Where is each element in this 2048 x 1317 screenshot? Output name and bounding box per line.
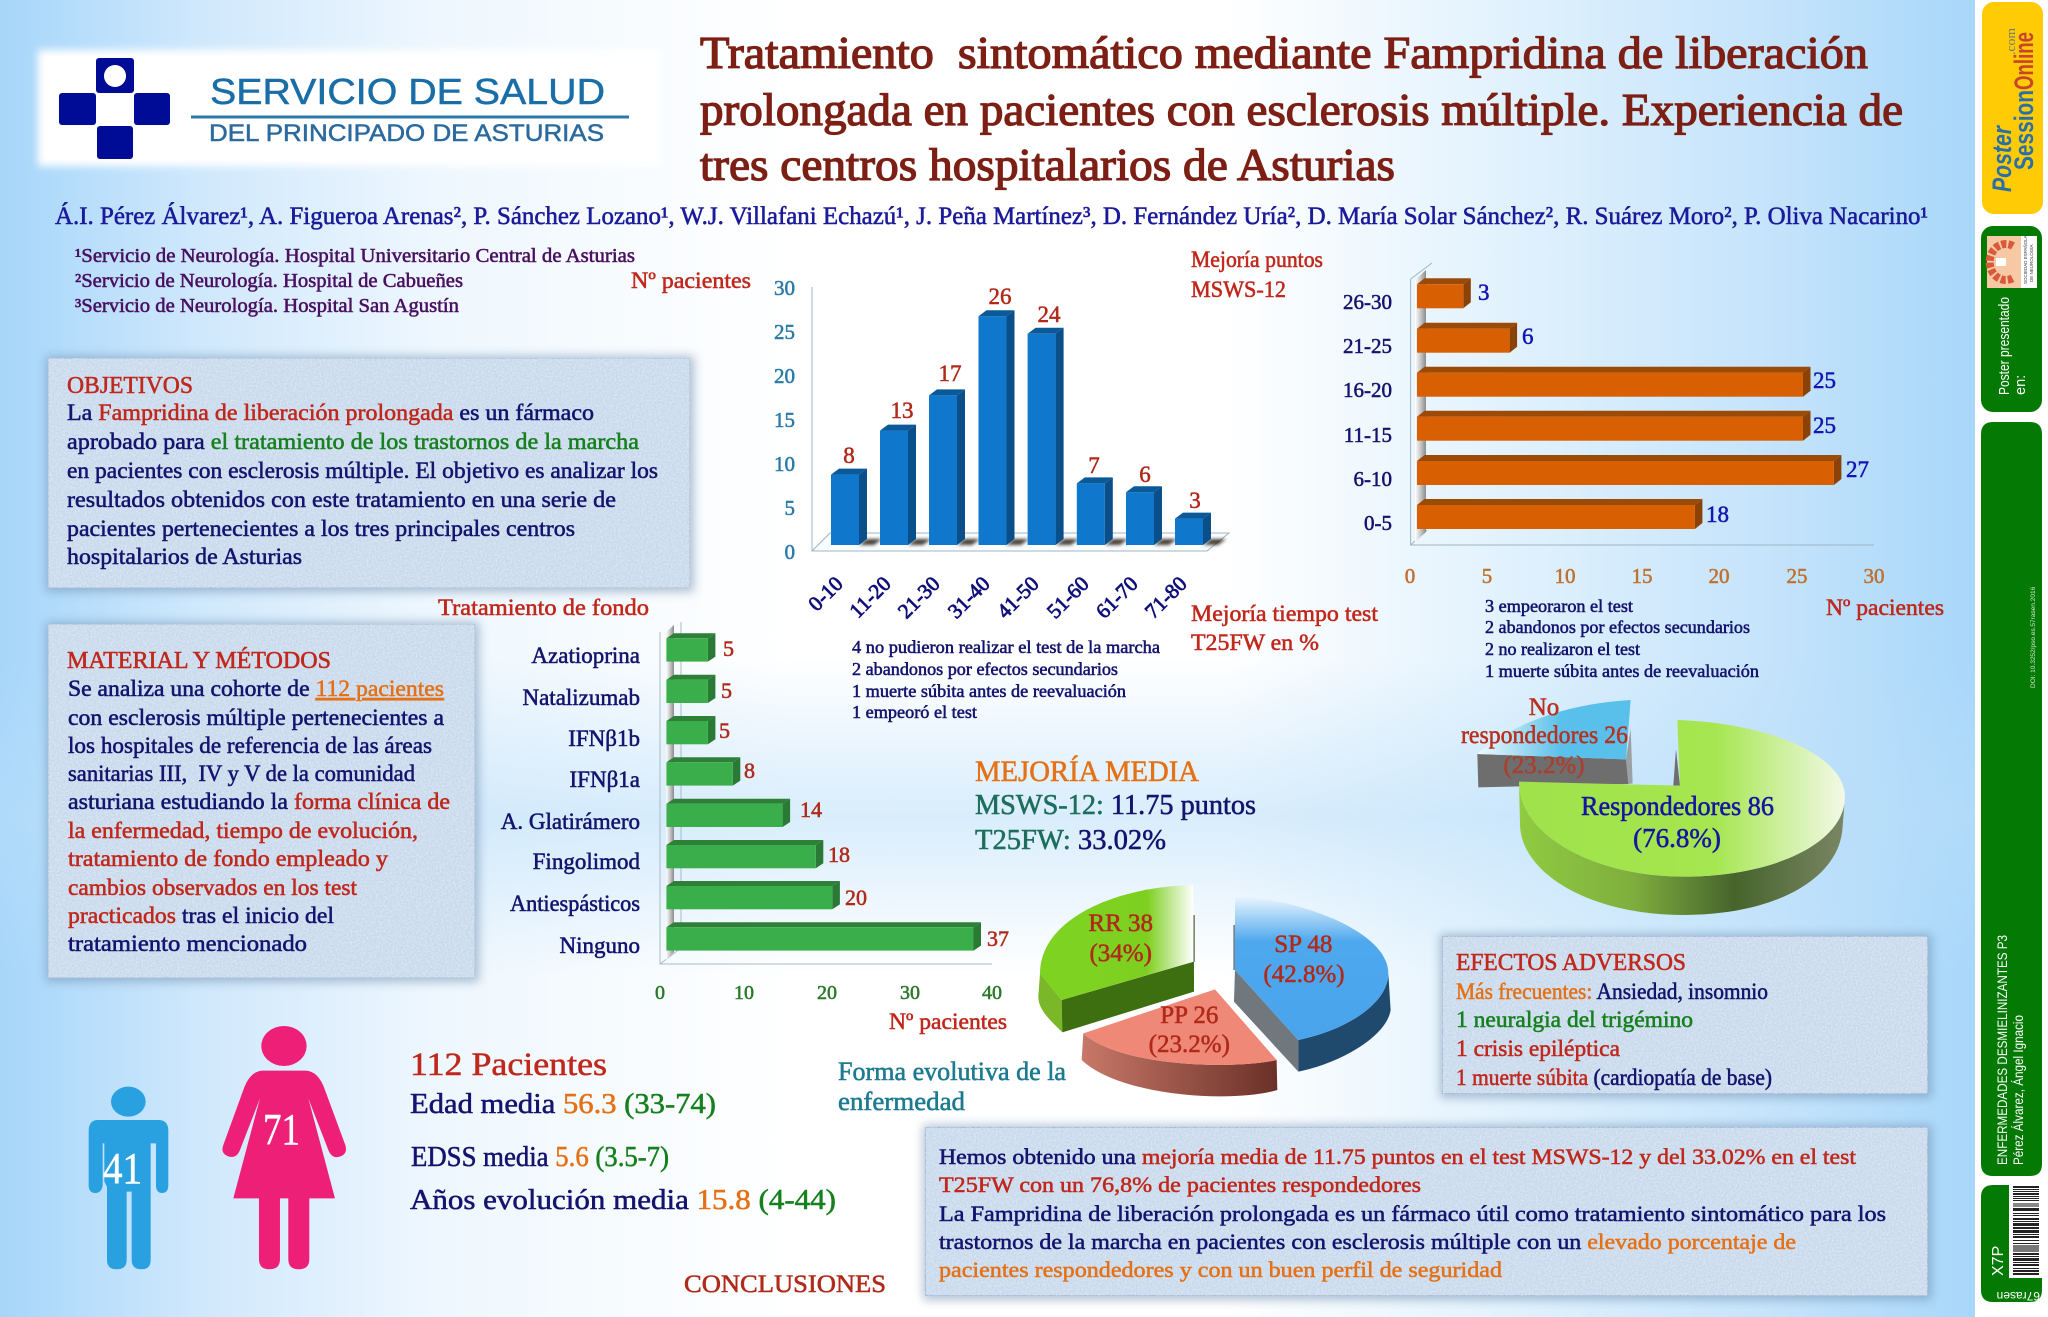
notes: test MSWS: 2 no realizaron el test <box>1485 639 1640 659</box>
value labels: 37 <box>987 926 1009 951</box>
value labels <box>719 636 1009 951</box>
labels: PP 26 <box>1160 1002 1218 1029</box>
panel: poster session online <box>1982 2 2043 214</box>
x axis labels: 41-50 <box>992 572 1044 623</box>
y axis labels: 20 <box>774 364 795 388</box>
value labels: 5 <box>723 636 734 661</box>
category labels <box>501 643 640 958</box>
stats: pacientes: 112 Pacientes <box>410 1047 607 1083</box>
slice: SP <box>1233 895 1391 1072</box>
x axis labels: 20 <box>1708 564 1730 588</box>
y axis labels <box>774 276 795 564</box>
bar 11-20 <box>880 425 916 545</box>
panel: poster session online: Session <box>2009 90 2039 170</box>
y axis labels: 0 <box>784 540 795 564</box>
text block: material y metodos <box>68 676 450 956</box>
axis title: pacientes chart 1: Nº pacientes <box>631 268 751 293</box>
stats: pacientes: Edad media 56.3 (33-74) <box>410 1088 716 1120</box>
panel: categoria: Pérez Álvarez, Ángel Ignacio <box>2010 1015 2026 1165</box>
x axis labels: 0 <box>1405 564 1415 588</box>
bar chart: tratamiento de fondo <box>501 622 1009 1004</box>
y axis labels: 15 <box>774 408 795 432</box>
panel: categoria: ENFERMEDADES DESMIELINIZANTES P3 <box>1994 935 2010 1165</box>
bar Antiespasticos <box>666 881 840 909</box>
text block: conclusiones: trastornos de la marcha en pacientes con esclerosis múltiple con un elevado porcentaje de <box>939 1229 1796 1254</box>
text block: material y metodos: tratamiento de fondo empleado y <box>68 846 389 871</box>
text block: objetivos: La Fampridina de liberación prolongada es un fármaco <box>67 400 594 426</box>
category labels: IFNβ1b <box>568 726 640 751</box>
text block: efectos adversos <box>1456 979 1772 1090</box>
axis title: pacientes chart 2: Nº pacientes <box>1826 595 1944 620</box>
y axis labels: 10 <box>774 452 795 476</box>
text block: objetivos <box>67 400 658 570</box>
x axis labels: 20 <box>817 982 837 1004</box>
x axis labels: 31-40 <box>943 572 995 623</box>
bar A. Glatiramero <box>666 799 790 827</box>
stats: pacientes: EDSS media 5.6 (3.5-7) <box>411 1141 669 1173</box>
panel: material y metodos <box>46 622 479 982</box>
value labels: 6 <box>1139 462 1151 487</box>
panel: poster session online: Poster <box>1987 125 2017 192</box>
x axis labels: 30 <box>900 982 920 1004</box>
value labels <box>1478 280 1869 527</box>
panel: categoria <box>1981 422 2042 1176</box>
callout: mejoria media: MSWS-12: 11.75 puntos <box>975 790 1256 821</box>
value labels: 6 <box>1522 324 1534 349</box>
value labels: 18 <box>1706 502 1729 527</box>
category labels: Azatioprina <box>531 643 640 668</box>
x axis labels: 30 <box>1864 564 1884 588</box>
x axis labels <box>655 982 1002 1004</box>
bar 0-5 <box>1417 499 1702 529</box>
text block: conclusiones: T25FW con un 76,8% de pacientes respondedores <box>939 1172 1421 1197</box>
value labels: 3 <box>1478 280 1490 305</box>
bar IFN beta 1a <box>666 757 740 786</box>
bar 71-80 <box>1175 513 1211 545</box>
panel: poster presentado <box>1981 226 2042 412</box>
labels: RR 38 <box>1088 910 1153 937</box>
panel: poster session online: .com <box>2003 28 2018 55</box>
value labels: 26 <box>988 284 1012 309</box>
bar 21-25 <box>1417 323 1517 353</box>
x axis labels <box>1405 564 1884 588</box>
x axis labels: 71-80 <box>1140 572 1192 623</box>
axis title: mejoria tiempo T25FW <box>1191 601 1379 655</box>
x axis labels: 10 <box>734 982 754 1004</box>
x axis labels <box>803 572 1192 623</box>
category labels: Natalizumab <box>522 685 640 710</box>
category labels: A. Glatirámero <box>501 809 640 834</box>
text block: efectos adversos: 1 muerte súbita (cardiopatía de base) <box>1456 1065 1772 1090</box>
panel: poster presentado: Poster presentado <box>1997 297 2013 395</box>
affiliations: ³Servicio de Neurología. Hospital San Agustín <box>75 296 459 317</box>
bar 11-15 <box>1417 411 1810 441</box>
y axis labels: 30 <box>774 276 795 300</box>
bar 51-60 <box>1077 477 1113 545</box>
category labels: 0-5 <box>1364 511 1392 535</box>
y axis labels: 25 <box>774 320 795 344</box>
axis title: mejoria puntos MSWS-12 <box>1191 247 1323 302</box>
icon: woman 71 <box>222 1026 346 1269</box>
category labels: Ninguno <box>560 933 640 958</box>
text block: objetivos: resultados obtenidos con este tratamiento en una serie de <box>67 487 616 513</box>
text block: efectos adversos: 1 crisis epiléptica <box>1456 1036 1620 1061</box>
value labels: 14 <box>800 797 822 822</box>
label: no respondedores: respondedores 26 <box>1461 722 1628 749</box>
axis title: tratamiento de fondo: Tratamiento de fondo <box>438 595 649 620</box>
icon: sociedad de neurologia: DE NEUROLOGÍA <box>2028 244 2034 282</box>
value labels: 20 <box>845 885 867 910</box>
text block: conclusiones <box>939 1144 1886 1282</box>
icon: man 41 <box>89 1087 168 1269</box>
x axis labels: 11-20 <box>844 572 896 623</box>
bar Azatioprina <box>666 633 715 662</box>
bar chart: mejoria MSWS-12 <box>1343 263 1884 588</box>
heading: efectos adversos: EFECTOS ADVERSOS <box>1456 950 1686 976</box>
labels <box>1088 910 1345 1058</box>
labels: (42.8%) <box>1263 961 1345 988</box>
bar chart: edad <box>774 276 1229 623</box>
text block: objetivos: pacientes pertenecientes a los tres principales centros <box>67 516 575 542</box>
text block: conclusiones: pacientes respondedores y con un buen perfil de seguridad <box>939 1257 1502 1282</box>
slice: respondedores <box>1519 720 1845 915</box>
text block: objetivos: aprobado para el tratamiento de los trastornos de la marcha <box>67 429 640 455</box>
category labels: 26-30 <box>1343 290 1392 314</box>
notes: test marcha: 2 abandonos por efectos secundarios <box>852 659 1118 679</box>
value labels: 18 <box>828 842 850 867</box>
label: no respondedores: (23.2%) <box>1503 752 1585 779</box>
axis title: mejoria tiempo T25FW: Mejoría tiempo test <box>1191 601 1379 626</box>
labels: SP 48 <box>1274 931 1332 958</box>
panel: poster session online: Online <box>2009 32 2039 90</box>
value labels: 8 <box>843 443 855 468</box>
bar IFN beta 1b <box>666 716 715 744</box>
x axis labels: 40 <box>982 982 1002 1004</box>
slice: RR <box>1038 885 1195 1032</box>
bar 61-70 <box>1126 486 1162 545</box>
icon: sociedad de neurologia <box>1987 235 2037 288</box>
panel: poster presentado: en: <box>2013 375 2029 395</box>
logo: Servicio de Salud: SERVICIO DE SALUD <box>210 71 605 112</box>
text block: material y metodos: los hospitales de referencia de las áreas <box>68 733 432 758</box>
title <box>700 28 1903 190</box>
value labels: 7 <box>1088 453 1100 478</box>
text block: conclusiones: La Fampridina de liberación prolongada es un fármaco útil como tratamiento sintomático para los <box>939 1201 1886 1226</box>
notes: test marcha <box>852 637 1160 722</box>
text block: material y metodos: la enfermedad, tiempo de evolución, <box>68 818 418 843</box>
notes: test MSWS: 3 empeoraron el test <box>1485 596 1633 616</box>
category labels: 11-15 <box>1344 423 1392 447</box>
category labels: 21-25 <box>1343 334 1392 358</box>
label: forma evolutiva: enfermedad <box>838 1087 965 1116</box>
notes: test MSWS: 2 abandonos por efectos secundarios <box>1485 617 1750 637</box>
text block: material y metodos: asturiana estudiando la forma clínica de <box>68 789 450 814</box>
label: respondedores: Respondedores 86 <box>1581 791 1774 821</box>
heading: conclusiones: CONCLUSIONES <box>684 1271 886 1298</box>
panel: objetivos <box>46 356 694 592</box>
icon: sociedad de neurologia: SOCIEDAD ESPAÑOLA <box>2022 235 2028 284</box>
label: respondedores: (76.8%) <box>1633 823 1721 853</box>
bar 21-30 <box>929 389 965 545</box>
panel: categoria: DOI: 10.3252/pso.es.57rasen.2016 <box>2030 586 2037 688</box>
label: no respondedores: No <box>1529 694 1559 721</box>
notes: test MSWS: 1 muerte súbita antes de reevaluación <box>1485 661 1759 681</box>
axis title: mejoria puntos MSWS-12: Mejoría puntos <box>1191 247 1323 272</box>
x axis labels: 25 <box>1786 564 1808 588</box>
notes: test marcha: 1 muerte súbita antes de reevaluación <box>852 681 1126 701</box>
icon: man 41: 41 <box>103 1144 142 1193</box>
affiliations: ²Servicio de Neurología. Hospital de Cabueñes <box>75 271 463 292</box>
text block: material y metodos: sanitarias III, IV y V de la comunidad <box>68 761 415 786</box>
bar 16-20 <box>1417 367 1810 397</box>
labels: (23.2%) <box>1149 1031 1230 1058</box>
panel: barcode: 67rasen <box>1997 1289 2040 1303</box>
bar 41-50 <box>1028 328 1064 545</box>
heading: material y metodos: MATERIAL Y MÉTODOS <box>67 648 331 674</box>
text block: objetivos: hospitalarios de Asturias <box>67 544 302 570</box>
bar Natalizumab <box>666 675 715 703</box>
authors: Á.I. Pérez Álvarez¹, A. Figueroa Arenas², P. Sánchez Lozano¹, W.J. Villafani Echazú¹, J. Peña Martínez³, D. Fernández Uría², D. María Solar Sánchez², R. Suárez Moro², P. Oliva Nacarino¹ <box>55 202 1928 230</box>
text block: material y metodos: tratamiento mencionado <box>68 931 307 956</box>
title: tres centros hospitalarios de Asturias <box>700 140 1395 190</box>
value labels: 24 <box>1038 302 1061 327</box>
x axis labels: 61-70 <box>1091 572 1143 623</box>
value labels: 25 <box>1813 413 1836 438</box>
callout: mejoria media: MEJORÍA MEDIA <box>975 755 1199 788</box>
category labels: Fingolimod <box>533 849 640 874</box>
bar Fingolimod <box>666 840 823 868</box>
pie chart: respondedores <box>1461 694 1845 915</box>
bar 0-10 <box>831 469 867 545</box>
notes: test marcha: 1 empeoró el test <box>852 702 977 722</box>
text block: material y metodos: practicados tras el inicio del <box>68 903 334 928</box>
text block: efectos adversos: Más frecuentes: Ansiedad, insomnio <box>1456 979 1768 1004</box>
value labels: 8 <box>744 758 755 783</box>
text block: objetivos: en pacientes con esclerosis múltiple. El objetivo es analizar los <box>67 458 658 484</box>
floor shadows <box>859 539 1226 545</box>
axis title: mejoria puntos MSWS-12: MSWS-12 <box>1191 277 1286 302</box>
panel: barcode: X7P <box>1990 1246 2007 1276</box>
label: forma evolutiva <box>838 1057 1066 1116</box>
panel: barcode <box>1981 1185 2042 1303</box>
text block: material y metodos: Se analiza una cohorte de 112 pacientes <box>68 676 444 701</box>
label: forma evolutiva: Forma evolutiva de la <box>838 1057 1066 1086</box>
title: Tratamiento sintomático mediante Fampridina de liberación <box>700 28 1868 78</box>
value labels: 5 <box>719 718 730 743</box>
panel: conclusiones <box>923 1125 1932 1300</box>
sidebar <box>1981 2 2043 1303</box>
title: prolongada en pacientes con esclerosis múltiple. Experiencia de <box>700 85 1903 135</box>
x axis labels: 5 <box>1482 564 1492 588</box>
text block: efectos adversos: 1 neuralgia del trigémino <box>1456 1007 1693 1032</box>
bar 31-40 <box>978 310 1014 545</box>
bar 6-10 <box>1417 455 1841 485</box>
x axis labels: 0 <box>655 982 665 1004</box>
category labels: 16-20 <box>1343 378 1392 402</box>
value labels: 17 <box>938 361 962 386</box>
text block: material y metodos: cambios observados en los test <box>68 875 358 900</box>
text block: conclusiones: Hemos obtenido una mejoría media de 11.75 puntos en el test MSWS-12 y del 33.02% en el test <box>939 1144 1857 1169</box>
axis title: pacientes chart 3: Nº pacientes <box>889 1009 1007 1034</box>
x axis labels: 10 <box>1554 564 1576 588</box>
x axis labels: 15 <box>1632 564 1652 588</box>
panel: efectos adversos <box>1440 934 1932 1098</box>
value labels: 27 <box>1846 457 1869 482</box>
stats: pacientes: Años evolución media 15.8 (4-44) <box>410 1184 836 1216</box>
slice: no respondedores <box>1477 700 1633 787</box>
x axis labels: 21-30 <box>893 572 945 623</box>
slice: PP <box>1082 989 1277 1096</box>
category labels: IFNβ1a <box>570 767 640 792</box>
x axis labels: 51-60 <box>1042 572 1094 623</box>
value labels: 25 <box>1813 368 1836 393</box>
value labels <box>843 284 1201 513</box>
icon: cross <box>59 58 170 159</box>
logo: Servicio de Salud: DEL PRINCIPADO DE ASTURIAS <box>209 120 604 147</box>
bar Ninguno <box>666 922 981 951</box>
value labels: 5 <box>721 678 732 703</box>
logo: Servicio de Salud <box>38 50 660 166</box>
category labels: Antiespásticos <box>510 891 640 916</box>
notes: test marcha: 4 no pudieron realizar el test de la marcha <box>852 637 1160 657</box>
category labels: 6-10 <box>1354 467 1392 491</box>
value labels: 13 <box>890 398 914 423</box>
value labels: 3 <box>1189 488 1201 513</box>
icon: woman 71: 71 <box>263 1105 300 1154</box>
label: no respondedores <box>1461 694 1628 779</box>
callout: mejoria media: T25FW: 33.02% <box>975 825 1166 856</box>
x axis labels: 0-10 <box>803 572 848 616</box>
text block: material y metodos: con esclerosis múltiple pertenecientes a <box>68 705 444 730</box>
heading: objetivos: OBJETIVOS <box>67 373 193 399</box>
callout: mejoria media <box>975 755 1256 856</box>
affiliations: ¹Servicio de Neurología. Hospital Universitario Central de Asturias <box>75 246 635 267</box>
pie chart: forma evolutiva <box>1038 885 1391 1096</box>
notes: test MSWS <box>1485 596 1759 681</box>
stats: pacientes <box>410 1047 836 1216</box>
axis title: mejoria tiempo T25FW: T25FW en % <box>1191 630 1319 655</box>
bar 26-30 <box>1417 278 1471 308</box>
labels: (34%) <box>1089 940 1152 967</box>
category labels <box>1343 290 1392 535</box>
y axis labels: 5 <box>784 496 795 520</box>
label: respondedores <box>1581 791 1774 853</box>
affiliations <box>75 246 635 317</box>
barcode bars <box>2013 1186 2039 1275</box>
